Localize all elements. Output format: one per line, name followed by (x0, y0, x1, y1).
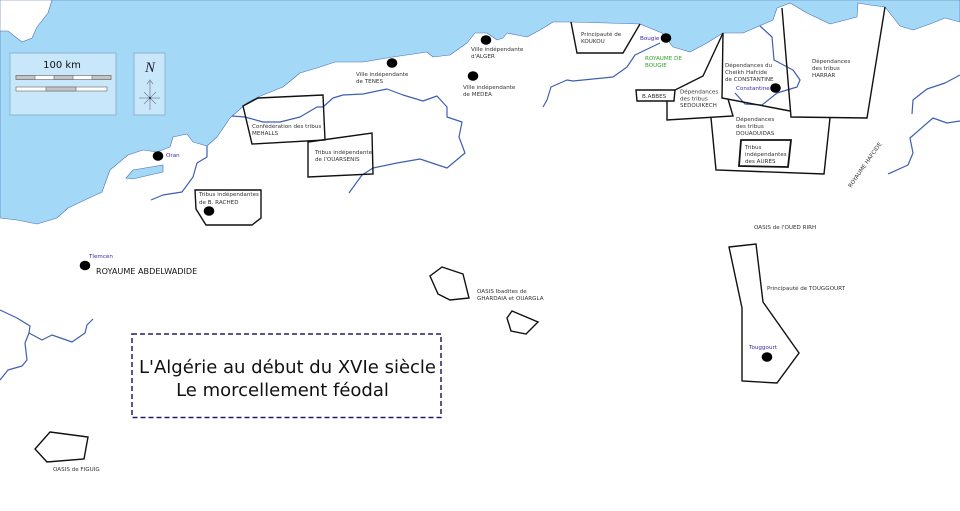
territory labels: Dépendances (736, 116, 774, 123)
city markers (80, 33, 781, 362)
city names: Oran (166, 153, 180, 159)
sea (0, 0, 960, 224)
territory: Touggourt (729, 244, 799, 383)
title box: Le morcellement féodal (176, 380, 389, 401)
oasis: Ouargla (507, 311, 538, 334)
territory labels: de l'OUARSENIS (315, 157, 360, 163)
territory labels: Dépendances (812, 58, 850, 65)
city names: Touggourt (748, 345, 778, 351)
territory labels: indépendantes (745, 151, 787, 158)
territory labels (53, 31, 884, 473)
oasis: Ghardaia (430, 267, 469, 300)
city names: Tlemcen (88, 254, 113, 260)
territory labels: des tribus (680, 96, 708, 102)
scale panel: 100 km (43, 60, 81, 71)
territory labels: GHARDAIA et OUARGLA (477, 296, 544, 302)
title box (132, 334, 441, 418)
territory labels: de TENES (356, 79, 383, 85)
territory labels: des AURES (745, 159, 776, 165)
territory labels: HARRAR (812, 73, 835, 79)
territory labels: Cheikh Hafcide (725, 70, 768, 76)
territory labels: Ville indépendante (463, 84, 516, 91)
compass panel: N (144, 60, 156, 76)
title box: L'Algérie au début du XVIe siècle (139, 357, 436, 378)
territory labels: DOUAOUIDAS (736, 131, 775, 137)
territory labels: Dépendances (680, 88, 718, 96)
territory: Ouarsenis (308, 133, 373, 177)
territory labels: ROYAUME DE (645, 56, 682, 62)
territory labels: des tribus (812, 66, 840, 72)
territory labels: de CONSTANTINE (725, 77, 774, 83)
rivers (0, 26, 960, 380)
city names (88, 36, 778, 351)
scale panel (10, 53, 116, 115)
territory labels: BOUGIE (645, 63, 667, 69)
territory labels: d'ALGER (471, 54, 495, 60)
territory: Koukou (571, 22, 640, 53)
territory labels: Principauté de TOUGGOURT (767, 285, 846, 292)
territory: Douaouidas (711, 118, 830, 174)
territory: B. Rached (195, 190, 261, 225)
territory labels: Ville indépendante (471, 46, 524, 53)
city names: Constantine (736, 86, 770, 92)
territory: Sedouikech (667, 33, 733, 120)
territory labels: MEHALLS (252, 131, 279, 137)
territory labels: de B. RACHED (199, 200, 239, 206)
territory labels: Principauté de (581, 31, 622, 38)
territory labels: Confédération des tribus (252, 123, 321, 130)
territory labels: Ville indépendante (356, 71, 409, 78)
lake (126, 165, 163, 179)
territory labels: ROYAUME ABDELWADIDE (96, 266, 197, 276)
oasis: Figuig (35, 432, 88, 462)
compass panel (134, 53, 165, 115)
territory labels: des tribus (736, 124, 764, 130)
territory labels: B.ABBES (642, 94, 667, 100)
territory: B. Abbes (636, 90, 675, 101)
territory labels: ROYAUME HAFCIDE (848, 141, 884, 189)
territory labels: OASIS Ibadites de (477, 289, 527, 295)
land: Spain (0, 0, 52, 42)
territory: Constantine (722, 33, 790, 111)
territory labels: KOUKOU (581, 39, 605, 45)
territory labels: Tribus (744, 145, 762, 151)
territory labels: OASIS de l'OUED RIRH (754, 225, 816, 231)
territory: Harrar (782, 7, 885, 118)
territory labels: de MEDEA (463, 92, 492, 98)
territory labels: SEDOUIKECH (680, 103, 717, 109)
city names: Bougie (640, 36, 660, 42)
territory labels: Dépendances du (725, 62, 773, 69)
territory labels: OASIS de FIGUIG (53, 467, 100, 473)
territory: Mehalls (243, 95, 325, 144)
territory labels: Tribus indépendantes (198, 191, 259, 198)
territory labels: Tribus indépendante (314, 149, 373, 156)
territory: Aures (739, 140, 791, 167)
